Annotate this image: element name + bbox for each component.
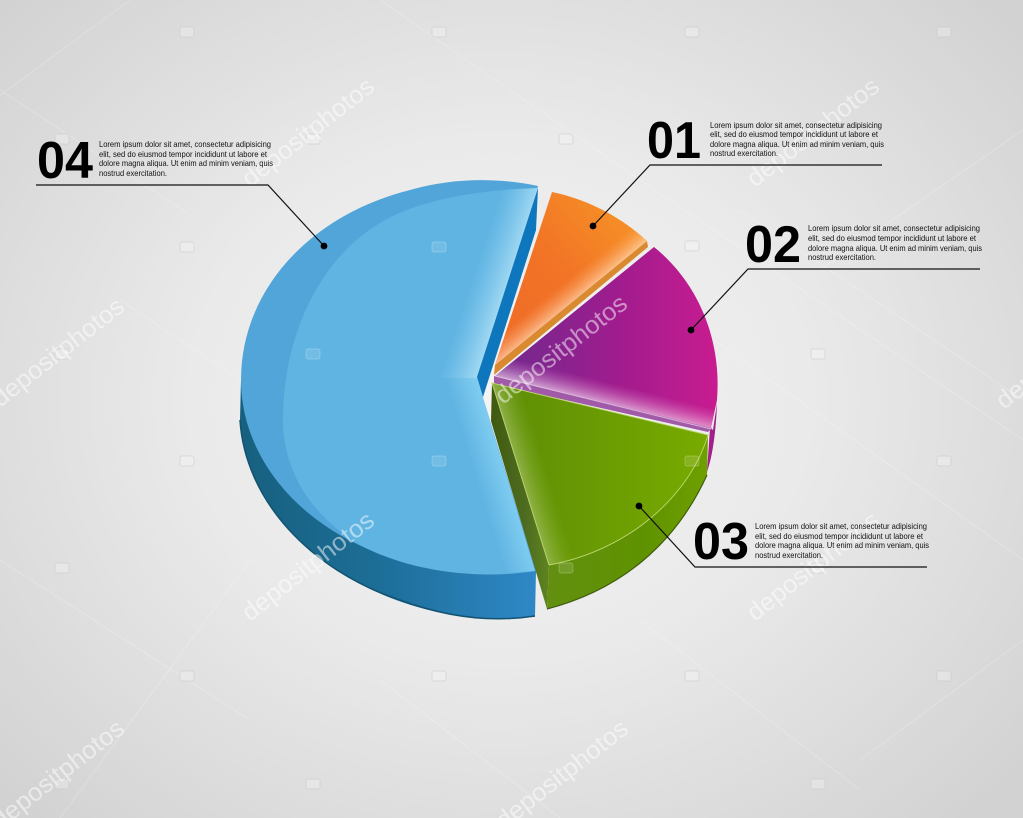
watermark text: depositphotos	[236, 72, 380, 193]
callout 03: 03	[693, 513, 749, 571]
callout 02: 02	[745, 216, 801, 274]
watermark text: depositphotos	[489, 289, 633, 410]
callout 01: Lorem ipsum dolor sit amet, consectetur adipisicing	[710, 120, 882, 130]
callout 01: dolore magna aliqua. Ut enim ad minim veniam, quis	[710, 139, 884, 149]
slice 04: blue	[240, 180, 538, 619]
callout 02	[688, 216, 982, 333]
watermark text: depositphotos	[741, 72, 885, 193]
camera watermark icons over chart	[306, 242, 699, 573]
callout 03	[636, 503, 929, 571]
callout 01: elit, sed do eiusmod tempor incididunt ut labore et	[710, 129, 879, 139]
slice 03: green	[491, 383, 708, 609]
callout 01: 01	[647, 112, 701, 170]
callout 04	[36, 132, 327, 249]
watermark text: depositphotos	[236, 506, 380, 627]
callout 03: dolore magna aliqua. Ut enim ad minim veniam, quis	[755, 540, 929, 550]
slice 02: purple	[494, 247, 718, 472]
callout 04: 04	[37, 132, 93, 190]
callout 04: elit, sed do eiusmod tempor incididunt ut labore et	[99, 149, 268, 159]
callout 03: Lorem ipsum dolor sit amet, consectetur adipisicing	[755, 521, 927, 531]
callout 04: dolore magna aliqua. Ut enim ad minim veniam, quis	[99, 158, 273, 168]
3D pie chart	[240, 180, 718, 619]
callout 02: Lorem ipsum dolor sit amet, consectetur adipisicing	[808, 223, 980, 233]
slice 01: orange	[494, 192, 648, 375]
callout 02: nostrud exercitation.	[808, 252, 876, 262]
watermark text: depositphotos	[741, 506, 885, 627]
callout 02: elit, sed do eiusmod tempor incididunt ut labore et	[808, 233, 977, 243]
callout 02: dolore magna aliqua. Ut enim ad minim veniam, quis	[808, 243, 982, 253]
callout 01	[590, 112, 884, 229]
callout 03: nostrud exercitation.	[755, 550, 823, 560]
callout 04: Lorem ipsum dolor sit amet, consectetur adipisicing	[99, 139, 271, 149]
callout 03: elit, sed do eiusmod tempor incididunt ut labore et	[755, 531, 924, 541]
callout 04: nostrud exercitation.	[99, 168, 167, 178]
callout 01: nostrud exercitation.	[710, 148, 778, 158]
